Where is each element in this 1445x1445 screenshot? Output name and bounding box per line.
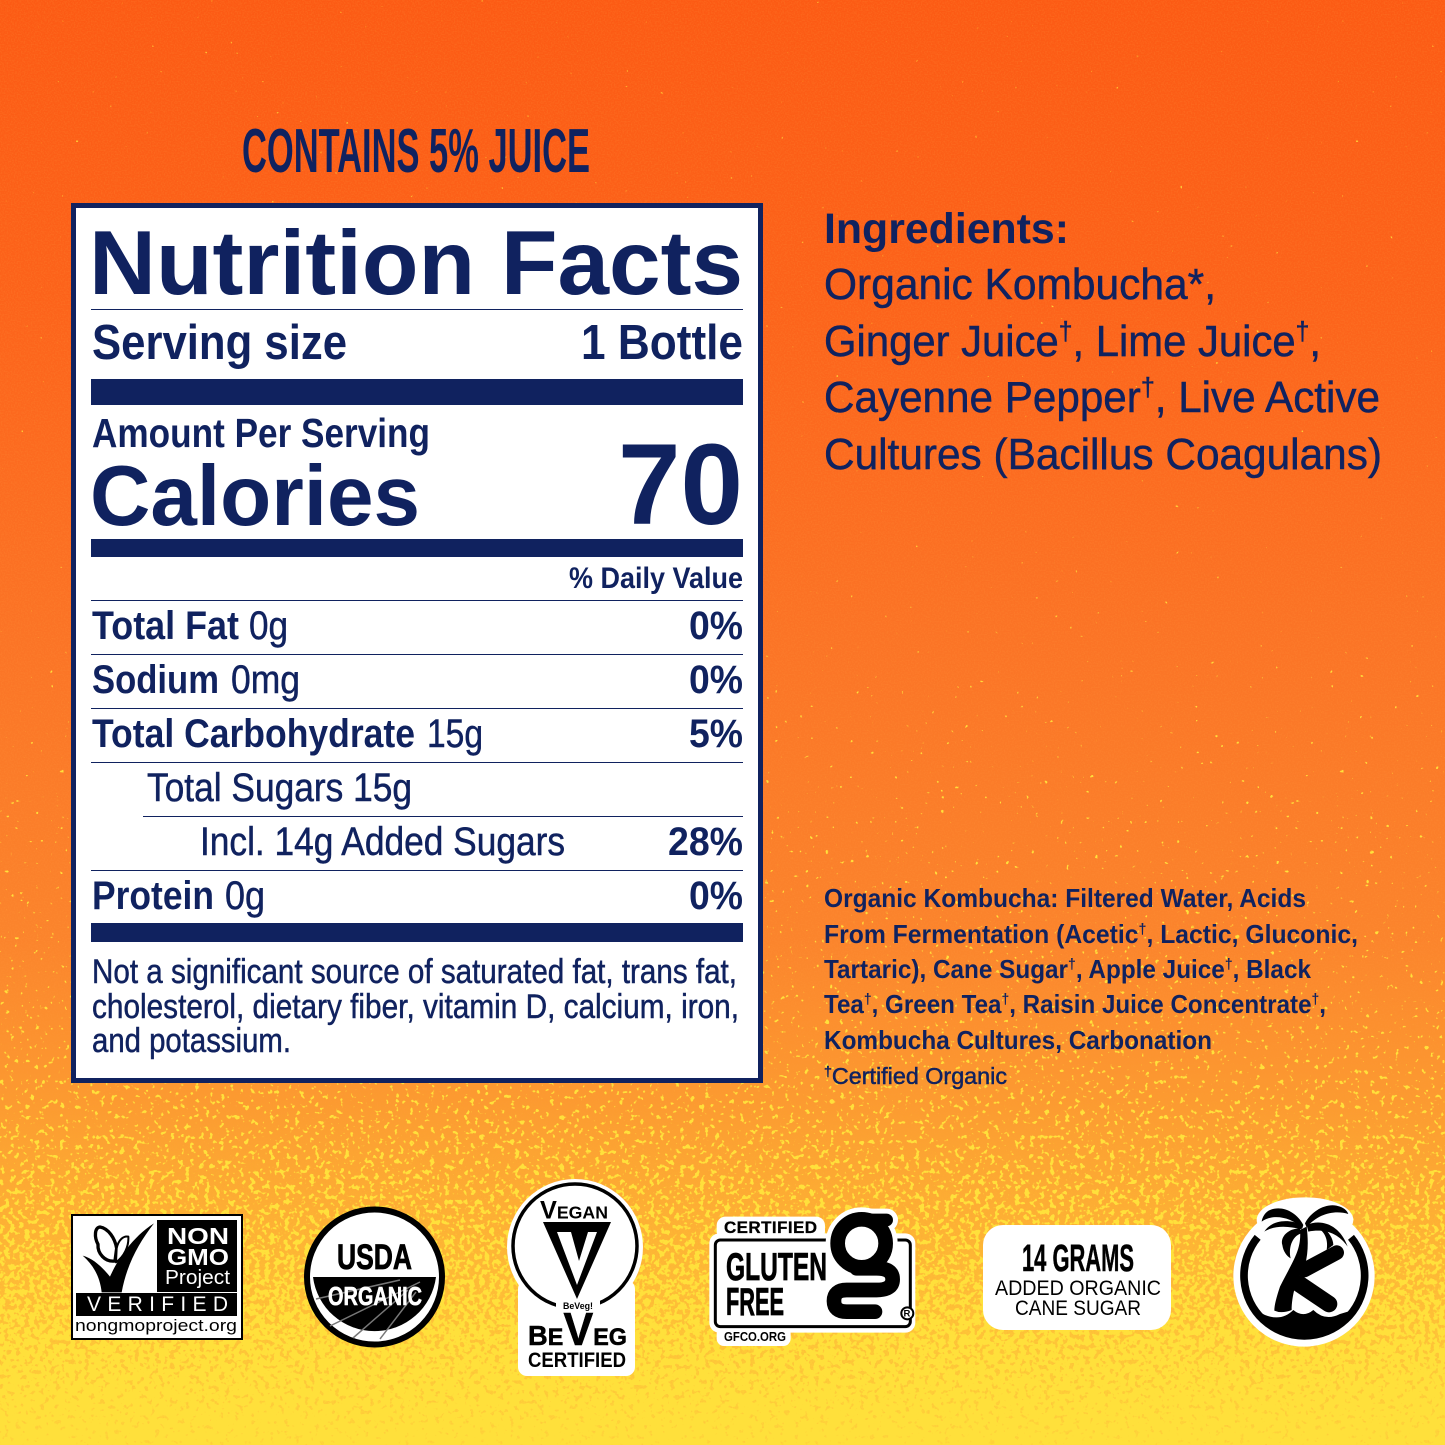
row: protein: 0% bbox=[689, 874, 743, 918]
calories row: Calories bbox=[90, 449, 420, 544]
row: added sugars: 28% bbox=[668, 820, 743, 864]
kombucha sub-ingredients block: Tea bbox=[824, 989, 867, 1019]
ingredients block: , Live Active bbox=[1155, 373, 1380, 422]
row: total carbohydrate bbox=[92, 712, 743, 756]
kombucha sub-ingredients block: , Apple Juice bbox=[1076, 954, 1225, 984]
ingredients block: Cultures (Bacillus Coagulans) bbox=[824, 430, 1382, 479]
badge: 14 grams added organic cane sugar: CANE SUGAR bbox=[1015, 1297, 1141, 1320]
badge: non-GMO project verified: nongmoproject.org bbox=[75, 1316, 237, 1335]
footnote bbox=[92, 953, 739, 1060]
row: added sugars: Incl. 14g Added Sugars bbox=[200, 820, 565, 864]
row: total carbohydrate: 15g bbox=[427, 712, 483, 756]
ingredients block: , bbox=[1309, 317, 1321, 366]
row: total carbohydrate: 5% bbox=[689, 712, 743, 756]
heading: contains 5% juice: CONTAINS 5% JUICE bbox=[242, 117, 590, 186]
serving size row: Serving size bbox=[92, 316, 347, 370]
footnote: cholesterol, dietary fiber, vitamin D, calcium, iron, bbox=[92, 988, 739, 1026]
badge: certified gluten free: GFCO.ORG bbox=[724, 1329, 786, 1344]
icon: palm fronds bbox=[1262, 1205, 1348, 1258]
kombucha sub-ingredients block: , bbox=[1319, 989, 1326, 1019]
kombucha sub-ingredients block: , Green Tea bbox=[872, 989, 1002, 1019]
badge: USDA organic bbox=[307, 1210, 442, 1344]
row: total fat: Total Fat bbox=[92, 604, 239, 648]
row: protein: 0g bbox=[225, 874, 265, 918]
badge: USDA organic: ORGANIC bbox=[328, 1281, 422, 1311]
badge: 14 grams added organic cane sugar: ADDED ORGANIC bbox=[995, 1277, 1161, 1300]
kombucha sub-ingredients block: Certified Organic bbox=[832, 1063, 1007, 1089]
kombucha sub-ingredients block: † bbox=[1312, 991, 1319, 1008]
badge: non-GMO project verified: Project bbox=[165, 1267, 230, 1289]
badge: USDA organic: USDA bbox=[337, 1238, 412, 1277]
badge: BeVeg vegan certified: CERTIFIED bbox=[528, 1349, 626, 1372]
kombucha sub-ingredients block: From Fermentation (Acetic bbox=[824, 919, 1155, 949]
badge: BeVeg vegan certified: VEGAN bbox=[540, 1196, 608, 1224]
serving size row: 1 Bottle bbox=[581, 316, 743, 370]
ingredients block: † bbox=[1059, 316, 1073, 346]
ingredients block bbox=[824, 205, 1382, 479]
badge: 14 grams added organic cane sugar bbox=[983, 1225, 1171, 1330]
badge: non-GMO project verified: VERIFIED bbox=[87, 1293, 228, 1316]
badge: BeVeg vegan certified bbox=[507, 1179, 643, 1376]
badge: BeVeg vegan certified: BEVEG bbox=[528, 1303, 627, 1355]
nutrition facts title: Nutrition Facts bbox=[89, 213, 743, 314]
kombucha sub-ingredients block bbox=[824, 883, 1358, 1089]
badge: non-GMO project verified bbox=[72, 1215, 242, 1339]
kombucha sub-ingredients block: Organic Kombucha: Filtered Water, Acids bbox=[824, 883, 1306, 913]
icon: letter g bbox=[834, 1219, 893, 1312]
kombucha sub-ingredients block: , Lactic, Gluconic, bbox=[1146, 919, 1358, 949]
amount per serving label: Amount Per Serving bbox=[92, 410, 430, 456]
row: total carbohydrate: Total Carbohydrate bbox=[92, 712, 415, 756]
serving size row bbox=[92, 316, 743, 370]
badge: certified gluten free: GLUTEN bbox=[726, 1246, 827, 1289]
row: protein: Protein bbox=[92, 874, 214, 918]
kombucha sub-ingredients block: , Raisin Juice Concentrate bbox=[1009, 989, 1312, 1019]
row: sodium: 0% bbox=[689, 658, 743, 702]
kombucha sub-ingredients block: † bbox=[1139, 921, 1146, 938]
badge: non-GMO project verified: NON bbox=[167, 1223, 229, 1249]
kombucha sub-ingredients block: † bbox=[1001, 991, 1009, 1008]
row: total sugars: Total Sugars 15g bbox=[147, 766, 412, 810]
calories row bbox=[90, 421, 743, 549]
badge: 14 grams added organic cane sugar: 14 GRAMS bbox=[1022, 1238, 1134, 1280]
row: total fat: 0% bbox=[689, 604, 743, 648]
kombucha sub-ingredients block: Kombucha Cultures, Carbonation bbox=[824, 1025, 1212, 1055]
badge: certified gluten free: FREE bbox=[726, 1281, 784, 1324]
icon: V triangle bbox=[543, 1222, 611, 1299]
row: sodium: 0mg bbox=[231, 658, 300, 702]
kombucha sub-ingredients block: † bbox=[1068, 956, 1076, 973]
kombucha sub-ingredients block: † bbox=[864, 991, 872, 1008]
ingredients block: Cayenne Pepper bbox=[824, 373, 1154, 422]
badge: certified gluten free: R bbox=[904, 1308, 910, 1320]
row: total fat bbox=[92, 604, 743, 648]
ingredients block: Ingredients: bbox=[824, 205, 1069, 253]
footnote: Not a significant source of saturated fat, trans fat, bbox=[92, 953, 737, 991]
kombucha sub-ingredients block: † bbox=[1225, 956, 1233, 973]
row: protein bbox=[92, 874, 743, 918]
panel: nutrition facts bbox=[74, 206, 760, 1080]
ingredients block: Organic Kombucha*, bbox=[824, 260, 1216, 309]
kombucha sub-ingredients block: , Black bbox=[1233, 954, 1312, 984]
badge: palm tree K kosher mark bbox=[1233, 1197, 1375, 1347]
badge: BeVeg vegan certified: BeVeg! bbox=[563, 1301, 593, 1311]
row: total fat: 0g bbox=[249, 604, 288, 648]
ingredients block: † bbox=[1296, 316, 1309, 346]
kombucha sub-ingredients block: † bbox=[824, 1063, 832, 1079]
kombucha sub-ingredients block: Tartaric), Cane Sugar bbox=[824, 954, 1085, 984]
row: sodium: Sodium bbox=[92, 658, 219, 702]
badge: certified gluten free bbox=[709, 1217, 915, 1346]
row: sodium bbox=[92, 658, 743, 702]
icon: letter g halo bbox=[834, 1219, 893, 1312]
icon: K trunk bbox=[1274, 1227, 1337, 1312]
badge: non-GMO project verified: GMO bbox=[167, 1244, 229, 1270]
icon: butterfly on sprout bbox=[83, 1223, 154, 1292]
ingredients block: Ginger Juice bbox=[824, 317, 1071, 366]
footnote: and potassium. bbox=[92, 1022, 291, 1060]
ingredients block: † bbox=[1141, 372, 1155, 402]
ingredients block: , Lime Juice bbox=[1073, 317, 1296, 366]
badge: certified gluten free: CERTIFIED bbox=[724, 1218, 817, 1237]
calories row: 70 bbox=[618, 421, 743, 549]
daily value heading: % Daily Value bbox=[569, 562, 743, 595]
